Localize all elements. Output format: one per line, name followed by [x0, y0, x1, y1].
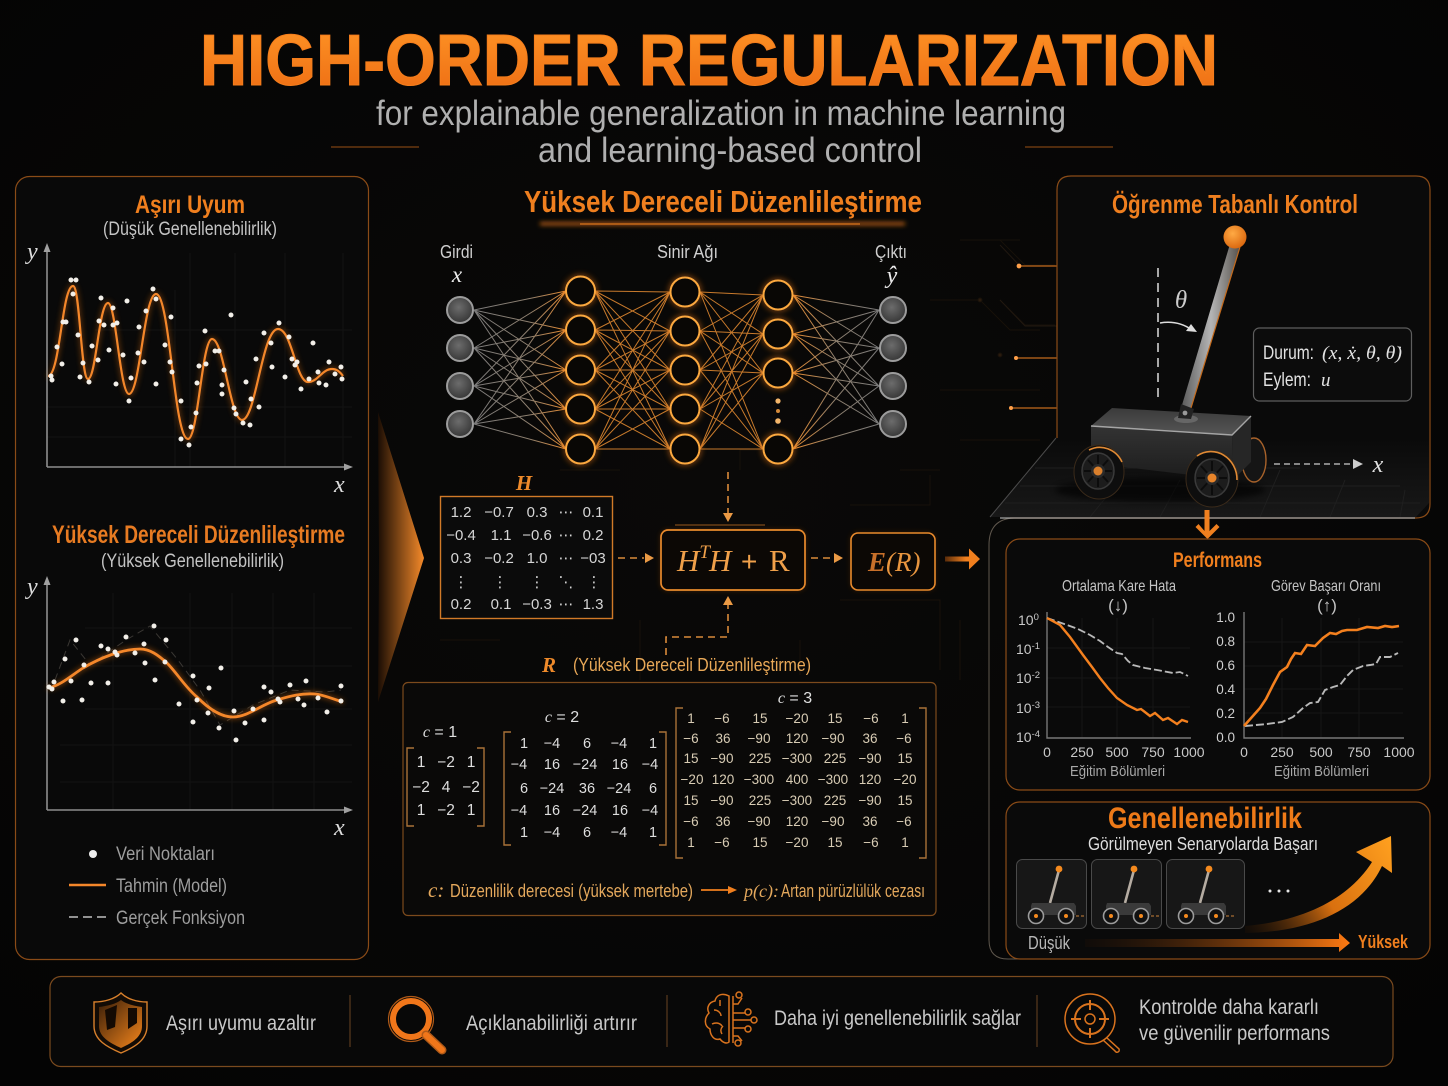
chart: task success rate [1216, 578, 1415, 780]
chart: regularized curve: y [25, 574, 38, 600]
matrix H: 0.3 [451, 550, 471, 567]
matrix c=2: 1 [649, 825, 657, 841]
subheading: low generalizability: (Düşük Genellenebilirlik) [103, 219, 277, 240]
floor [990, 438, 1429, 518]
right wheel [1186, 451, 1238, 507]
heading: high-order regularization: Yüksek Dereceli Düzenlileştirme [52, 521, 345, 549]
chart: regularized curve: x [333, 815, 345, 841]
matrix H: 0.1 [491, 596, 511, 613]
matrix H: −0.3 [522, 596, 552, 613]
state box: Eylem: [1263, 370, 1311, 391]
chart: task success rate: 1000 [1383, 744, 1415, 760]
formula box: E(R): E(R) [867, 547, 920, 577]
matrix c=2: c = 2 [545, 709, 579, 726]
matrix c=3: −90 [822, 731, 844, 746]
low-high scale: Yüksek [1358, 932, 1409, 952]
formula box: HTH + R: + [741, 546, 757, 577]
chart: mean squared error: Eğitim Bölümleri [1070, 763, 1165, 780]
matrix c=1: −2 [437, 754, 455, 771]
thumbnail: scenario 3 [1166, 860, 1244, 928]
matrix c=3: 1 [901, 835, 909, 850]
chart: task success rate: 0.6 [1216, 658, 1235, 673]
matrix c=3: −6 [896, 731, 912, 746]
chart: task success rate: 0.0 [1216, 730, 1235, 745]
text: reduce overfitting: Aşırı uyumu azaltır [166, 1012, 316, 1035]
icon: shield [94, 993, 147, 1053]
matrix H: 0.3 [527, 504, 547, 521]
left wheel [1074, 445, 1124, 499]
text: stable control: Kontrolde daha kararlı [1139, 996, 1319, 1019]
rising arrow [1245, 836, 1392, 933]
matrix H: −0.4 [446, 527, 476, 544]
neural network [440, 242, 907, 464]
subtitle: for explainable generalization in machine learning [376, 94, 1066, 133]
matrix c=3: 15 [897, 751, 913, 766]
matrix c=2: −24 [540, 781, 564, 797]
formula box: HTH + R [661, 525, 805, 590]
matrix c=3: 120 [712, 772, 734, 787]
chart: mean squared error: 10 [1016, 729, 1032, 745]
text: stable control: ve güvenilir performans [1139, 1022, 1330, 1045]
chart: task success rate: 0.4 [1216, 682, 1235, 697]
matrix c=3: 225 [749, 793, 771, 808]
matrix c=3: −90 [859, 751, 881, 766]
chart: task success rate: 1.0 [1216, 610, 1235, 625]
matrix H: ⋯ [558, 550, 574, 567]
circuit traces into control panel [1000, 245, 1057, 410]
chart: mean squared error: -3 [1032, 700, 1040, 711]
heading: center: Yüksek Dereceli Düzenlileştirme [524, 184, 922, 219]
matrix c=3: 36 [715, 731, 731, 746]
matrix c=3: −90 [711, 793, 733, 808]
matrix c=2: 16 [544, 757, 560, 773]
chart: regularized curve [25, 574, 353, 841]
label: R regularization [541, 653, 811, 677]
legend: Veri Noktaları [116, 844, 215, 865]
matrix c=2: −24 [573, 757, 597, 773]
matrix c=3: 15 [683, 793, 699, 808]
legend [69, 844, 245, 929]
matrix caption: Düzenlilik derecesi (yüksek mertebe) [450, 881, 693, 901]
text: better generalizability: Daha iyi genellenebilirlik sağlar [774, 1007, 1021, 1030]
matrix c=2: −4 [511, 803, 527, 819]
matrix c=3: −20 [681, 772, 703, 787]
chart: mean squared error: Ortalama Kare Hata [1062, 578, 1176, 595]
formula box: HTH + R: R [769, 543, 790, 578]
matrix H: 0.2 [583, 527, 603, 544]
matrix c=2: 16 [612, 757, 628, 773]
matrix c=2: 6 [583, 736, 591, 752]
heading: control: Öğrenme Tabanlı Kontrol [1112, 189, 1358, 219]
matrix c=3: 36 [862, 814, 878, 829]
chart: mean squared error [1016, 578, 1205, 780]
matrix c=3: −300 [782, 751, 812, 766]
network labels: Sinir Ağı [657, 242, 718, 262]
heading: generalizability: Genellenebilirlik [1108, 802, 1302, 835]
back wheel [1242, 438, 1266, 482]
matrix c=1: c = 1 [423, 724, 457, 741]
matrix H [440, 496, 612, 618]
title: HIGH-ORDER REGULARIZATION [200, 21, 1218, 101]
icon: cart-pole [1055, 226, 1266, 507]
matrix c=3: −90 [859, 793, 881, 808]
matrix c=3: 36 [862, 731, 878, 746]
low-high scale: Düşük [1028, 933, 1071, 953]
matrix caption: Artan pürüzlülük cezası [781, 881, 925, 901]
chart: mean squared error: 250 [1070, 744, 1094, 760]
panel: learning-based control [990, 176, 1430, 518]
state box [1254, 328, 1412, 401]
state box: (x, ẋ, θ, θ̇) [1322, 343, 1402, 364]
matrix c=3: −300 [782, 793, 812, 808]
matrix c=3: 15 [827, 711, 843, 726]
chart: mean squared error: 10 [1018, 612, 1034, 628]
chart: mean squared error: 0 [1034, 612, 1039, 623]
matrix c=2: 6 [649, 781, 657, 797]
panel: generalizability [1006, 802, 1430, 959]
matrix c=2 [504, 709, 666, 845]
matrix c=2: 6 [520, 781, 528, 797]
matrix c=3: 15 [827, 835, 843, 850]
matrix c=3: 15 [752, 711, 768, 726]
matrix c=3: 15 [897, 793, 913, 808]
matrix H: −0.2 [484, 550, 514, 567]
matrix c=1: 1 [467, 802, 475, 819]
subheading: Görülmeyen Senaryolarda Başarı [1088, 834, 1318, 854]
matrix c=3: c = 3 [778, 690, 812, 707]
matrix c=3: −90 [748, 814, 770, 829]
matrix c=1: −2 [437, 802, 455, 819]
matrix c=2: −4 [611, 825, 627, 841]
formula box: HTH + R: H [677, 543, 699, 578]
arrows: dashed flow [618, 472, 835, 655]
matrix H: 1.0 [527, 550, 547, 567]
chart: mean squared error: -1 [1032, 641, 1040, 652]
low-high scale [1028, 932, 1409, 953]
matrix c=3: 15 [752, 835, 768, 850]
matrix c=2: 36 [579, 781, 595, 797]
matrix c=3: −6 [714, 835, 730, 850]
matrix c=3: 225 [824, 751, 846, 766]
chart: task success rate: 750 [1347, 744, 1371, 760]
matrix c=3: −20 [894, 772, 916, 787]
matrix H: ⋯ [558, 596, 574, 613]
outer frame around performance panels [989, 518, 1030, 959]
chart: mean squared error: 750 [1141, 744, 1165, 760]
matrix H: ⋱ [558, 574, 574, 591]
matrix c=3: 400 [786, 772, 808, 787]
matrix c=2: 16 [544, 803, 560, 819]
matrix H: −0.7 [484, 504, 514, 521]
matrix caption: c: [428, 878, 444, 902]
panel: overfitting vs regularization [16, 176, 368, 960]
matrix caption [428, 878, 925, 902]
icon: target magnifier [1065, 994, 1119, 1052]
chart: mean squared error: 10 [1016, 641, 1032, 657]
matrix c=1: 1 [467, 754, 475, 771]
chart: task success rate: (↑) [1317, 596, 1337, 615]
hidden nodes [566, 276, 792, 464]
chart: mean squared error: (↓) [1108, 596, 1128, 615]
matrix c=2: −4 [544, 736, 560, 752]
matrix c=3: −300 [818, 772, 848, 787]
chart: task success rate: 0.8 [1216, 634, 1235, 649]
matrix c=1: 1 [417, 802, 425, 819]
thumbnail: scenario 2 [1092, 860, 1162, 928]
network labels: x [451, 262, 463, 287]
matrix c=3: 15 [683, 751, 699, 766]
matrix c=3: 120 [786, 814, 808, 829]
ellipsis [1270, 890, 1288, 892]
chart: mean squared error: -2 [1032, 670, 1040, 681]
chart: mean squared error: 0 [1043, 744, 1051, 760]
chart: task success rate: Eğitim Bölümleri [1274, 763, 1369, 780]
heading: performance: Performans [1173, 549, 1262, 572]
matrix c=3: 225 [749, 751, 771, 766]
subtitle [376, 94, 1066, 170]
matrix c=3: −90 [748, 731, 770, 746]
background circuit traces [440, 240, 1055, 680]
matrix c=3: −20 [786, 835, 808, 850]
arrow: chevron into center [378, 412, 424, 702]
text: increase explainability: Açıklanabilirliği artırır [466, 1012, 637, 1035]
matrix c=1: 1 [417, 754, 425, 771]
matrix c=2: −24 [607, 781, 631, 797]
arrow: to performance [945, 548, 980, 570]
panel: performance [1006, 539, 1430, 790]
chart: task success rate: 250 [1270, 744, 1294, 760]
matrix c=2: 1 [520, 736, 528, 752]
matrix c=3: −90 [822, 814, 844, 829]
matrix c=3: −6 [896, 814, 912, 829]
matrix H: ⋯ [558, 504, 574, 521]
matrix H: 1.3 [583, 596, 603, 613]
matrix H: −0.6 [522, 527, 552, 544]
heading: overfitting: Aşırı Uyum [135, 191, 245, 219]
matrix c=3: 225 [824, 793, 846, 808]
chart: mean squared error: 10 [1016, 700, 1032, 716]
chart: mean squared error: -4 [1032, 729, 1040, 740]
matrix H: ⋮ [492, 574, 508, 591]
matrix c=2: 1 [520, 825, 528, 841]
text: stable control [1139, 996, 1330, 1045]
angle marker [1158, 268, 1197, 403]
matrix c=1: −2 [412, 779, 430, 796]
network labels [440, 242, 907, 289]
connections [474, 291, 879, 449]
matrix c=3: −300 [744, 772, 774, 787]
matrix H: 0.2 [451, 596, 471, 613]
matrix H: 0.1 [583, 504, 603, 521]
matrix c=3: 1 [901, 711, 909, 726]
matrix c=2: −24 [573, 803, 597, 819]
network labels: Girdi [440, 242, 473, 262]
pole [1182, 244, 1240, 408]
label: R regularization: (Yüksek Dereceli Düzenlileştirme) [573, 655, 811, 675]
matrix c=3: −20 [786, 711, 808, 726]
matrix c=3: 1 [687, 835, 695, 850]
subheading: high generalizability: (Yüksek Genellenebilirlik) [101, 551, 284, 572]
matrix c=3: −6 [683, 814, 699, 829]
chart: task success rate: 0 [1240, 744, 1248, 760]
output nodes [880, 297, 906, 437]
matrix H: ⋮ [530, 574, 544, 591]
hidden node glow [566, 276, 792, 464]
chart: task success rate: 500 [1309, 744, 1333, 760]
chart: task success rate: 0.2 [1216, 706, 1235, 721]
icon: brain circuit [705, 992, 757, 1046]
matrix c=3: −6 [863, 835, 879, 850]
formula box: E(R) [851, 533, 935, 590]
chart: overfitting curve [25, 239, 353, 498]
direction arrow x: x [1372, 452, 1384, 478]
chart: mean squared error: 500 [1105, 744, 1129, 760]
cart body [1091, 408, 1251, 435]
thumbnail: scenario 1 [1016, 860, 1086, 928]
label: H: H [515, 471, 533, 495]
chart: mean squared error: 1000 [1173, 744, 1205, 760]
chart: mean squared error: 10 [1016, 670, 1032, 686]
chart: overfitting curve: x [333, 472, 345, 498]
formula box: HTH + R: H [708, 543, 733, 578]
matrix c=2: −4 [544, 825, 560, 841]
angle marker: θ [1175, 287, 1187, 314]
legend: Tahmin (Model) [116, 876, 227, 897]
chart: overfitting curve: y [25, 239, 38, 265]
matrix c=2: 1 [649, 736, 657, 752]
matrix H: 1.1 [491, 527, 511, 544]
matrix H: 1.2 [451, 504, 471, 521]
icon: magnifier [388, 996, 442, 1050]
matrix c=3: 120 [859, 772, 881, 787]
network labels: Çıktı [875, 242, 907, 262]
subtitle: and learning-based control [538, 131, 922, 170]
matrix H: ⋮ [454, 574, 468, 591]
matrix c=3: −90 [711, 751, 733, 766]
ball [1224, 226, 1246, 248]
formula box: HTH + R: T [699, 542, 711, 563]
pivot [1174, 415, 1198, 423]
input nodes [447, 297, 473, 437]
panel: regularization matrices [403, 682, 936, 916]
matrix c=3: −6 [714, 711, 730, 726]
legend: Gerçek Fonksiyon [116, 908, 245, 929]
matrix H: ⋮ [586, 574, 602, 591]
arrow: control to performance [1196, 510, 1220, 539]
matrix c=3: 36 [715, 814, 731, 829]
state box: Durum: [1263, 343, 1314, 364]
matrix H: −03 [580, 550, 606, 567]
matrix c=3: 120 [786, 731, 808, 746]
matrix c=2: −4 [511, 757, 527, 773]
matrix c=3 [676, 690, 926, 858]
matrix c=3: −6 [863, 711, 879, 726]
matrix c=3: −6 [683, 731, 699, 746]
matrix c=1: 4 [442, 779, 451, 796]
direction arrow x [1274, 452, 1384, 478]
matrix caption: p(c): [742, 881, 779, 902]
panel: benefits bar [50, 976, 1393, 1066]
matrix c=2: −4 [642, 757, 658, 773]
matrix c=1 [407, 724, 484, 826]
matrix H: ⋯ [558, 527, 574, 544]
matrix c=3: 1 [687, 711, 695, 726]
matrix c=1: −2 [462, 779, 480, 796]
matrix c=2: −4 [611, 736, 627, 752]
matrix c=2: 16 [612, 803, 628, 819]
state box: u [1321, 370, 1330, 391]
label: R regularization: R [541, 653, 556, 677]
network labels: ŷ [885, 263, 898, 289]
matrix c=2: 6 [583, 825, 591, 841]
chart: task success rate: Görev Başarı Oranı [1271, 578, 1381, 595]
matrix c=2: −4 [642, 803, 658, 819]
